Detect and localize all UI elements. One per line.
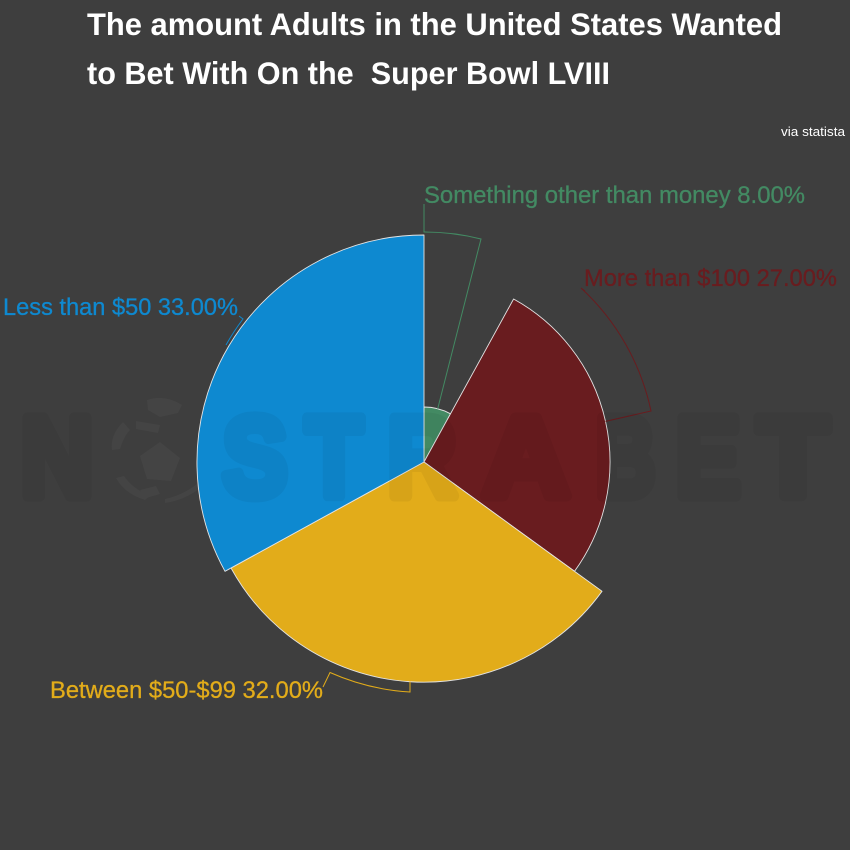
watermark: NOSTRABET: A (482, 394, 570, 520)
leader line: Less than $50 (226, 316, 243, 345)
slice: Between $50-$99 (231, 462, 602, 682)
watermark: NOSTRABET: E (676, 394, 740, 520)
pie chart (197, 235, 610, 682)
watermark: NOSTRABET: T (758, 394, 828, 520)
watermark: NOSTRABET: N (20, 394, 94, 520)
watermark: soccer ball (112, 398, 200, 503)
source note: via statista (781, 125, 845, 139)
watermark: NOSTRABET: B (596, 394, 656, 520)
slice: Less than $50 (197, 235, 424, 571)
leader line: Something other than money (424, 204, 481, 409)
slice: More than $100 (424, 299, 610, 571)
title: to Bet With On the Super Bowl LVIII (87, 55, 610, 91)
label: Between $50-$99: Between $50-$99 32.00% (50, 677, 323, 704)
label: Something other than money: Something other than money 8.00% (424, 182, 805, 209)
slice: Something other than money (424, 407, 450, 462)
watermark: NOSTRABET: T (306, 394, 362, 520)
leader line: Between $50-$99 (323, 672, 410, 692)
watermark: NOSTRABET: R (388, 394, 456, 520)
watermark: NOSTRABET (20, 394, 828, 520)
label: More than $100: More than $100 27.00% (584, 265, 837, 292)
label: Less than $50: Less than $50 33.00% (3, 294, 238, 321)
title (87, 6, 782, 91)
leader line: More than $100 (581, 288, 651, 421)
watermark: NOSTRABET: S (222, 394, 288, 520)
title: The amount Adults in the United States Wanted (87, 6, 782, 42)
